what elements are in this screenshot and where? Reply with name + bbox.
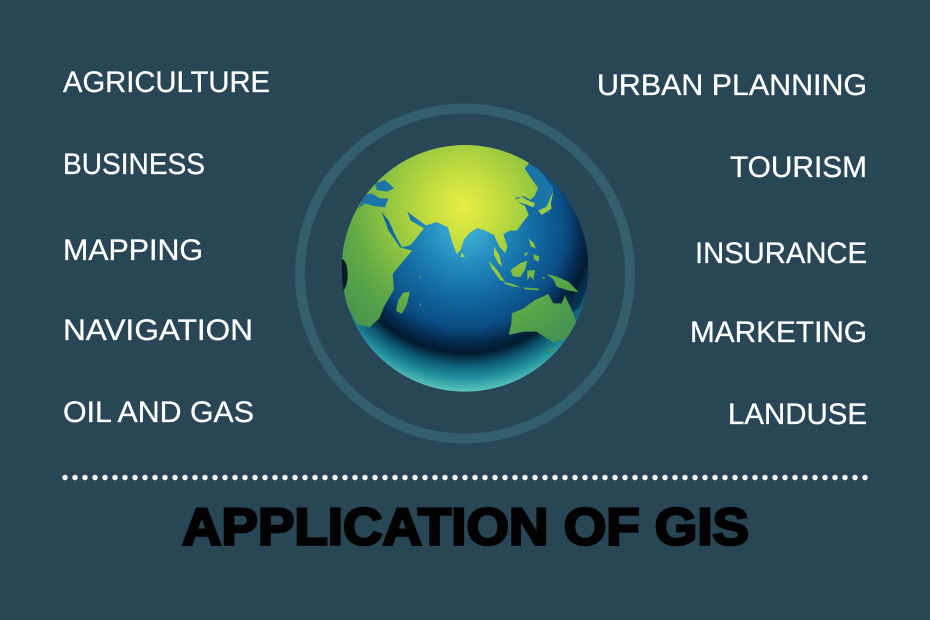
Sumatra bbox=[488, 261, 505, 282]
label: landuse: LANDUSE bbox=[728, 398, 867, 431]
label: agriculture: AGRICULTURE bbox=[63, 66, 270, 99]
ocean sphere bbox=[342, 145, 588, 392]
Malay peninsula bbox=[494, 247, 502, 267]
dark limb east bbox=[565, 274, 588, 312]
label: business: BUSINESS bbox=[63, 148, 205, 181]
Borneo bbox=[511, 261, 527, 277]
label: tourism: TOURISM bbox=[730, 151, 867, 184]
Madagascar bbox=[396, 292, 410, 314]
Philippines bbox=[529, 238, 539, 262]
label: urban planning: URBAN PLANNING bbox=[597, 69, 867, 102]
Okhotsk region bbox=[525, 164, 553, 213]
label: mapping: MAPPING bbox=[63, 234, 203, 267]
label: oil and gas: OIL AND GAS bbox=[63, 396, 254, 429]
Korea bbox=[514, 197, 535, 207]
label: marketing: MARKETING bbox=[690, 316, 867, 349]
Japan islands bbox=[538, 192, 553, 215]
label: insurance: INSURANCE bbox=[695, 237, 867, 270]
title: APPLICATION OF GIS bbox=[182, 498, 749, 556]
Sulawesi bbox=[527, 270, 535, 281]
continents bbox=[342, 145, 579, 352]
right application list bbox=[597, 69, 867, 431]
label: navigation: NAVIGATION bbox=[63, 314, 253, 347]
dark limb west bbox=[342, 259, 348, 290]
ring around globe bbox=[300, 108, 630, 438]
left application list bbox=[63, 66, 270, 429]
New Guinea bbox=[547, 274, 579, 293]
inland seas and Japan bbox=[358, 164, 553, 215]
Australia bbox=[509, 294, 577, 343]
icon: globe bbox=[342, 145, 588, 392]
shadow on far side bbox=[336, 259, 588, 312]
small islands bbox=[419, 252, 553, 353]
Black Sea and Caspian bbox=[375, 180, 394, 192]
Mediterranean bbox=[358, 193, 388, 208]
Eurasia and Africa bbox=[342, 145, 538, 328]
Java bbox=[504, 282, 521, 287]
dotted divider bbox=[65, 475, 866, 480]
